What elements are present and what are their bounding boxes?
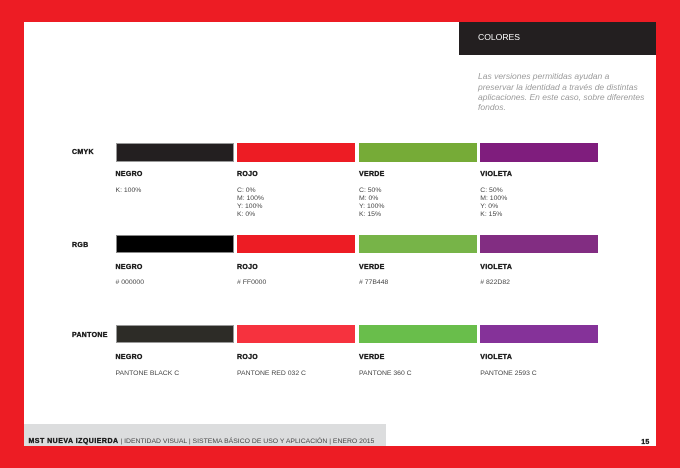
swatch: CMYK rojo: [237, 143, 355, 162]
value: verde RGB: # 77B448: [359, 279, 388, 286]
row label: RGB: RGB: [72, 242, 88, 249]
swatch: CMYK negro: [116, 143, 234, 162]
footer text: MST NUEVA IZQUIERDA | IDENTIDAD VISUAL | SISTEMA BÁSICO DE USO Y APLICACIÓN | ENERO 2015: [28, 438, 374, 445]
values: verde CMYK: Y: 100%: [359, 203, 384, 210]
swatch: Pantone verde: [359, 325, 477, 343]
heading: violeta: VIOLETA: [480, 170, 512, 178]
value: negro RGB: # 000000: [116, 279, 144, 286]
values: violeta CMYK: Y: 0%: [480, 203, 498, 210]
values: rojo CMYK: M: 100%: [237, 195, 264, 202]
values: violeta CMYK: [480, 187, 508, 218]
value: violeta Pantone: PANTONE 2593 C: [480, 370, 537, 377]
heading: negro: NEGRO: [116, 170, 143, 178]
footer bar: [24, 424, 386, 446]
swatch: RGB verde: [359, 234, 477, 253]
values: rojo CMYK: [237, 187, 264, 218]
heading: rojo: ROJO: [237, 264, 258, 270]
swatch: RGB rojo: [237, 234, 355, 253]
heading: violeta: VIOLETA: [480, 354, 512, 360]
heading: verde: VERDE: [359, 170, 385, 178]
heading: violeta: VIOLETA: [480, 264, 512, 270]
text block: intro: [478, 71, 644, 112]
value: verde Pantone: PANTONE 360 C: [359, 370, 412, 377]
panel: header bar: [459, 22, 656, 55]
values: negro CMYK: K: 100%: [116, 187, 141, 194]
text block: intro: preservar la identidad a través de distintas: [478, 82, 638, 92]
values: verde CMYK: M: 0%: [359, 195, 378, 202]
swatch: Pantone negro: [116, 325, 234, 343]
heading: rojo: ROJO: [237, 170, 258, 178]
values: verde CMYK: K: 15%: [359, 211, 381, 218]
values: rojo CMYK: C: 0%: [237, 187, 256, 194]
page number: 15: [641, 439, 649, 446]
swatch: Pantone violeta: [480, 325, 598, 343]
values: rojo CMYK: K: 0%: [237, 211, 255, 218]
swatch: RGB negro: [116, 234, 234, 253]
value: violeta RGB: # 822D82: [480, 279, 510, 286]
title: COLORES: [478, 32, 520, 42]
text block: intro: Las versiones permitidas ayudan a: [478, 71, 609, 81]
swatch: CMYK violeta: [480, 143, 598, 162]
heading: negro: NEGRO: [116, 354, 143, 360]
swatch: RGB violeta: [480, 234, 598, 253]
heading: negro: NEGRO: [116, 264, 143, 270]
value: rojo RGB: # FF0000: [237, 279, 266, 286]
heading: rojo: ROJO: [237, 354, 258, 360]
text block: intro: aplicaciones. En este caso, sobre diferentes: [478, 92, 644, 102]
value: rojo Pantone: PANTONE RED 032 C: [237, 370, 306, 377]
heading: verde: VERDE: [359, 354, 385, 360]
swatch: CMYK verde: [359, 143, 477, 162]
text block: intro: fondos.: [478, 102, 506, 112]
values: violeta CMYK: M: 100%: [480, 195, 507, 202]
values: violeta CMYK: C: 50%: [480, 187, 503, 194]
values: verde CMYK: [359, 187, 384, 218]
values: verde CMYK: C: 50%: [359, 187, 381, 194]
value: negro Pantone: PANTONE BLACK C: [116, 370, 179, 377]
heading: verde: VERDE: [359, 264, 385, 270]
row label: CMYK: CMYK: [72, 149, 94, 156]
values: violeta CMYK: K: 15%: [480, 211, 502, 218]
row label: PANTONE: PANTONE: [72, 332, 108, 339]
values: rojo CMYK: Y: 100%: [237, 203, 262, 210]
swatch: Pantone rojo: [237, 325, 355, 343]
